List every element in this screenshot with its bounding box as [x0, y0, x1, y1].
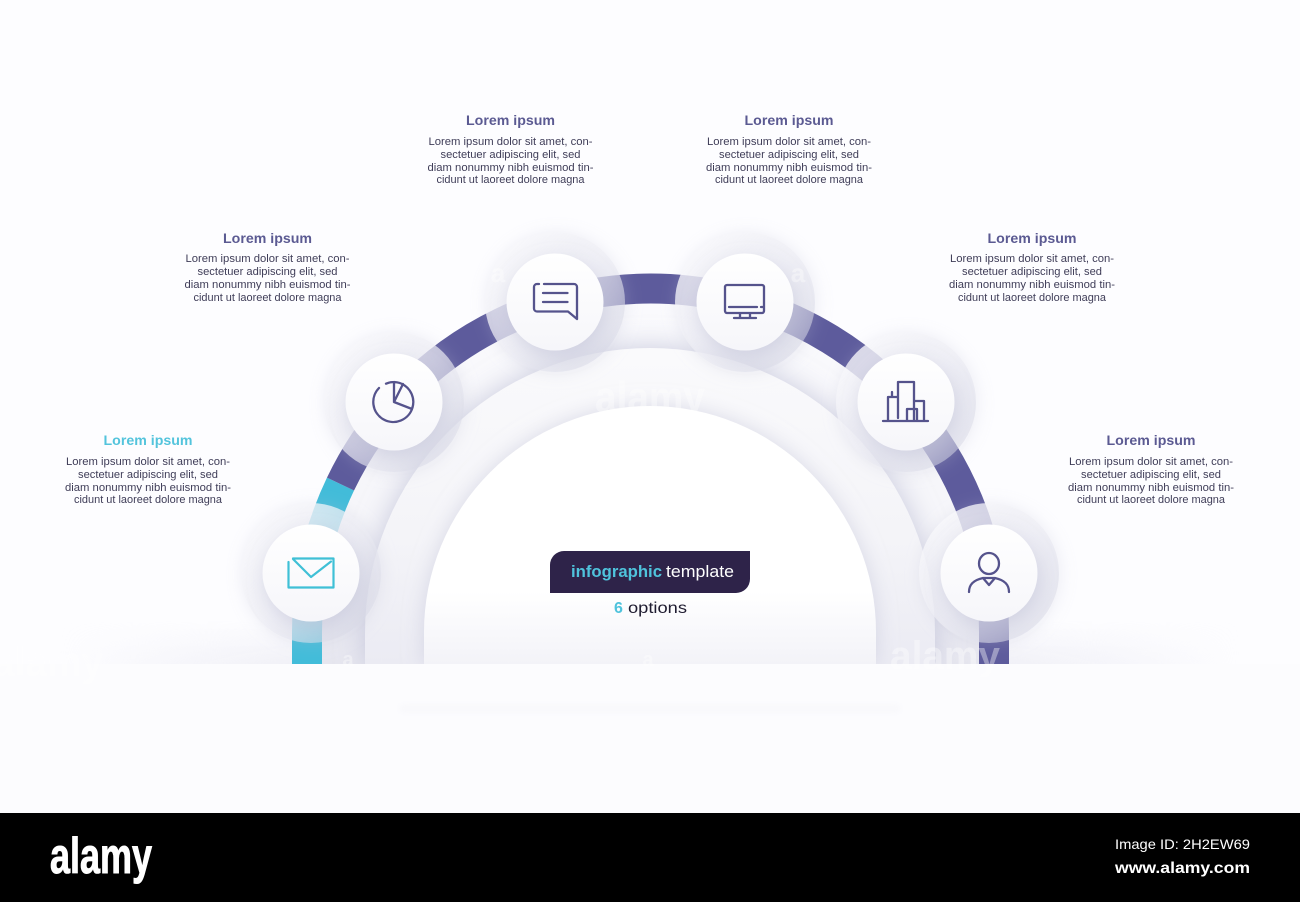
- text block: option 3: Lorem ipsum dolor sit amet, con-: [428, 136, 593, 148]
- text block: option 1: cidunt ut laoreet dolore magna: [74, 494, 223, 506]
- text block: option 3: diam nonummy nibh euismod tin-: [428, 162, 594, 174]
- icon: speech bubble: [534, 284, 577, 319]
- panel: area inside the ring: [322, 304, 979, 664]
- text block: option 3: cidunt ut laoreet dolore magna: [436, 174, 585, 186]
- node 2: chart: [324, 332, 464, 472]
- text block: option 1: sectetuer adipiscing elit, sed: [78, 469, 218, 481]
- watermarks: a: [342, 649, 354, 671]
- footer image id: Image ID: 2H2EW69: [1115, 836, 1250, 852]
- text block: option 2: Lorem ipsum: [223, 230, 312, 246]
- icon: buildings: [883, 382, 928, 421]
- center subheading: options: [628, 600, 687, 617]
- center heading badge: infographic: [571, 562, 662, 581]
- text block: option 6: cidunt ut laoreet dolore magna: [1077, 494, 1226, 506]
- watermarks: [0, 258, 1001, 685]
- center heading badge: [550, 551, 750, 593]
- icon: pie chart: [373, 382, 413, 422]
- text block: option 2: [184, 230, 351, 304]
- text block: option 2: sectetuer adipiscing elit, sed: [198, 266, 338, 278]
- text block: option 4: diam nonummy nibh euismod tin-: [706, 162, 872, 174]
- text block: option 3: [428, 112, 594, 186]
- text block: option 5: Lorem ipsum: [988, 230, 1076, 246]
- text block: option 5: [949, 230, 1115, 304]
- text block: option 6: Lorem ipsum dolor sit amet, con-: [1069, 456, 1233, 468]
- text block: option 5: sectetuer adipiscing elit, sed: [962, 266, 1102, 278]
- text block: option 2: diam nonummy nibh euismod tin-: [184, 279, 351, 291]
- icon: desktop monitor: [725, 285, 764, 318]
- footer bar: [0, 813, 1300, 902]
- text block: option 5: diam nonummy nibh euismod tin-: [949, 279, 1115, 291]
- text block: option 4: [706, 112, 872, 186]
- text block: option 5: Lorem ipsum dolor sit amet, con-: [950, 253, 1114, 265]
- text block: option 1: Lorem ipsum: [104, 432, 192, 448]
- text block: option 4: sectetuer adipiscing elit, sed: [719, 149, 859, 161]
- watermarks: alamy: [595, 373, 705, 422]
- icon: person: [969, 553, 1009, 592]
- text block: option 1: diam nonummy nibh euismod tin-: [65, 482, 231, 494]
- panel: central semicircle band: [365, 348, 935, 664]
- node 1: mail: [241, 503, 381, 643]
- footer logo: alamy: [50, 828, 152, 884]
- watermarks: a: [642, 649, 654, 671]
- text block: option 4: cidunt ut laoreet dolore magna: [715, 174, 864, 186]
- text block: option 3: sectetuer adipiscing elit, sed: [440, 149, 580, 161]
- center heading badge: template: [666, 562, 734, 581]
- text block: option 5: cidunt ut laoreet dolore magna: [958, 292, 1107, 304]
- node 5: buildings: [836, 332, 976, 472]
- text block: option 3: Lorem ipsum: [466, 112, 555, 128]
- icon: envelope: [288, 558, 334, 588]
- text block: option 2: cidunt ut laoreet dolore magna: [194, 292, 342, 304]
- ground strip: [0, 664, 1300, 813]
- text block: option 4: Lorem ipsum dolor sit amet, con-: [707, 136, 871, 148]
- ground strip shadow: [400, 707, 900, 710]
- node 4: monitor: [675, 232, 815, 372]
- ground shading: [204, 646, 1096, 664]
- ring: cyan segment: [307, 484, 340, 670]
- text block: option 2: Lorem ipsum dolor sit amet, con-: [186, 253, 350, 265]
- watermarks: a: [491, 258, 506, 288]
- text block: option 6: Lorem ipsum: [1106, 432, 1196, 448]
- text block: option 1: Lorem ipsum dolor sit amet, con-: [66, 456, 230, 468]
- text block: option 6: [1068, 432, 1234, 506]
- panel: central white semicircle: [424, 406, 876, 664]
- text block: option 6: sectetuer adipiscing elit, sed: [1081, 469, 1221, 481]
- watermarks: alamy: [890, 634, 1001, 678]
- watermarks: a: [791, 258, 806, 288]
- node 6: person: [919, 503, 1059, 643]
- footer url: www.alamy.com: [1114, 860, 1250, 877]
- ring: purple segment: [340, 289, 994, 670]
- text block: option 4: Lorem ipsum: [744, 112, 834, 128]
- center subheading: 6: [614, 600, 623, 617]
- node 3: chat: [485, 232, 625, 372]
- text block: option 1: [65, 432, 231, 506]
- text block: option 6: diam nonummy nibh euismod tin-: [1068, 482, 1234, 494]
